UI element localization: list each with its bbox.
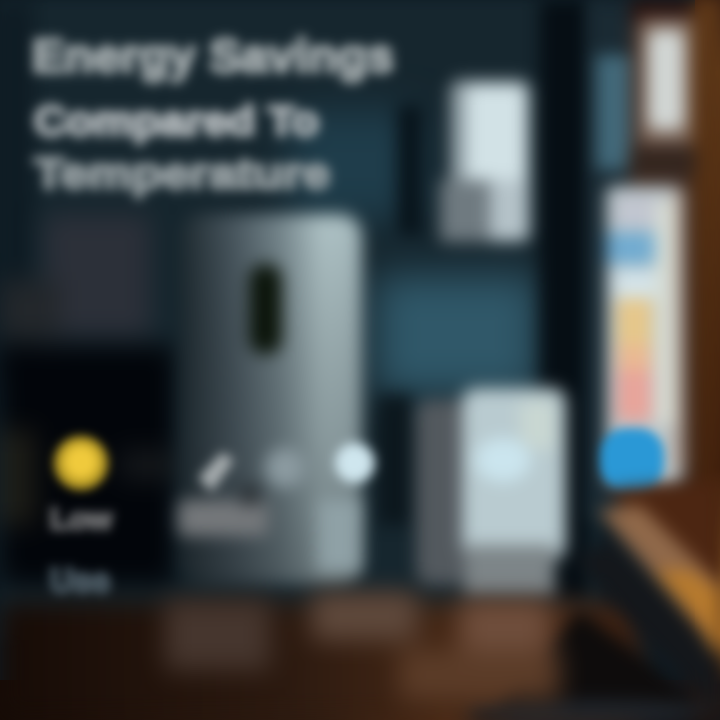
- caption: use: Use: [50, 562, 110, 600]
- caption: low: Low: [50, 503, 113, 536]
- title text: [32, 29, 394, 198]
- bright tilted highlight: [198, 452, 234, 492]
- wall thermostat: [440, 80, 530, 242]
- blue circle in panel: [600, 428, 664, 490]
- title line 3: Temperature: [34, 149, 330, 198]
- yellow sun icon: [54, 436, 108, 490]
- window frame on the right: [588, 0, 720, 720]
- title line 2: Compared To: [34, 97, 319, 144]
- background: dark wall: [0, 0, 600, 640]
- large air unit: [180, 214, 362, 584]
- small white units row: [178, 448, 360, 572]
- title line 1: Energy Savings: [32, 29, 394, 82]
- wooden floor: [0, 602, 640, 720]
- small caption text: [50, 503, 113, 600]
- colourful window panel: [606, 186, 684, 486]
- right white unit: [416, 388, 566, 595]
- floor reflections: [165, 592, 560, 700]
- dark left panel and black recess: [0, 215, 180, 585]
- bright round highlight: [335, 443, 375, 483]
- glow on right unit: [475, 438, 531, 482]
- window sill: [465, 480, 720, 720]
- dark wall columns: [378, 0, 588, 600]
